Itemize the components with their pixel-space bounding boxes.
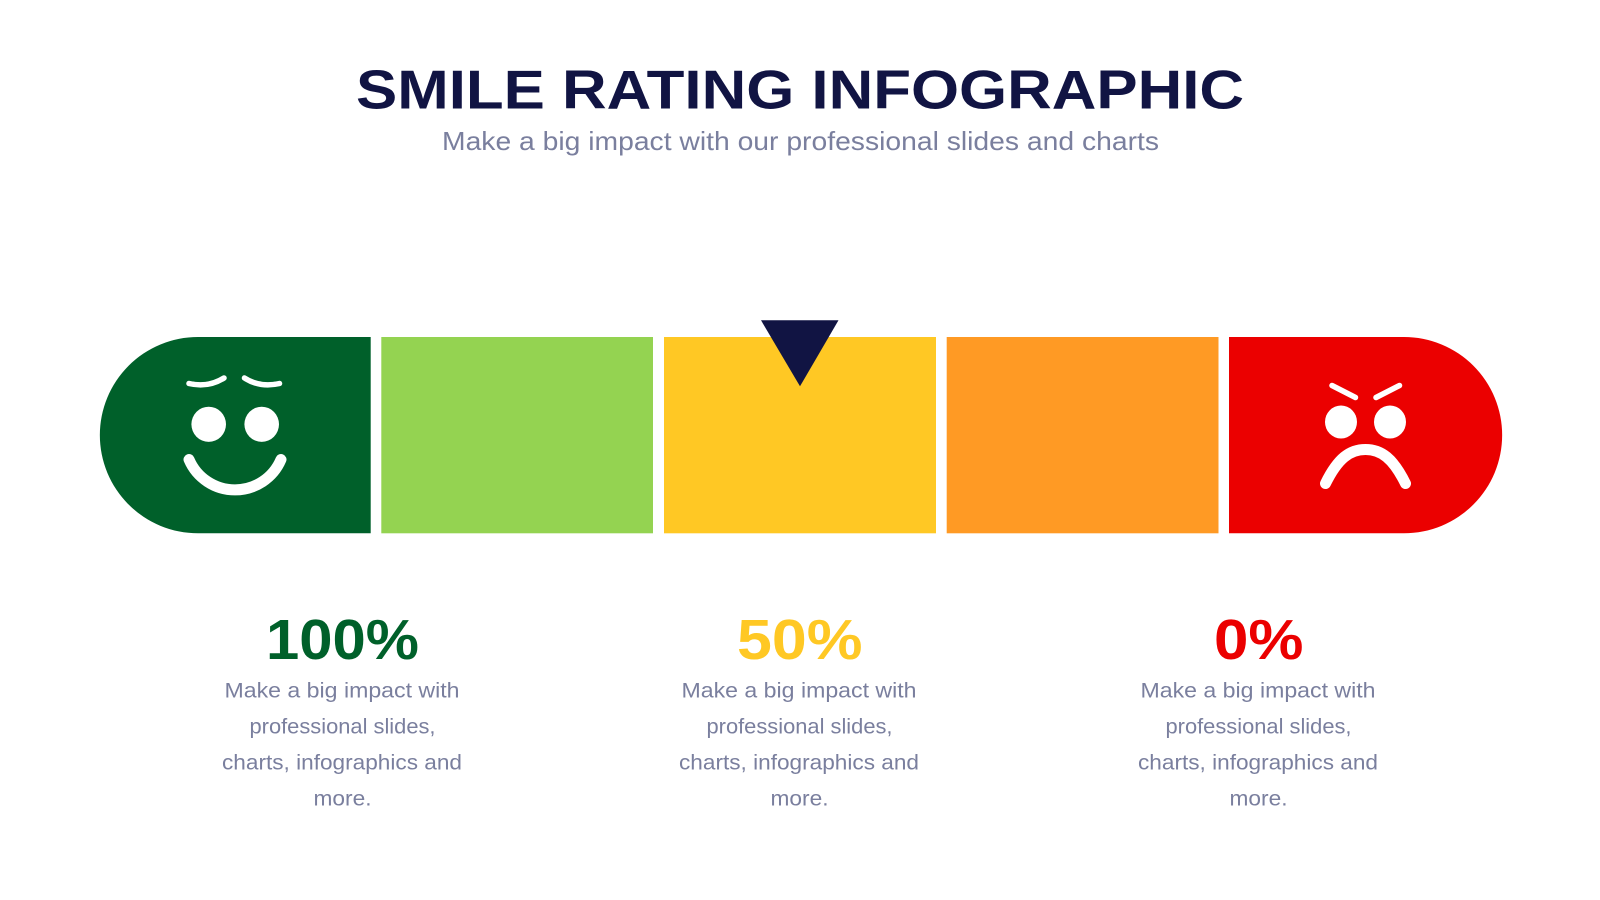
description: Make a big impact with xyxy=(1140,680,1376,702)
segment: dark green with happy face xyxy=(100,337,371,533)
subtitle: Make a big impact with our professional slides and charts xyxy=(442,126,1159,156)
description xyxy=(679,680,919,810)
description: Make a big impact with xyxy=(682,680,916,702)
value: 0%: 0% xyxy=(1214,608,1304,672)
segment: light green xyxy=(381,337,653,533)
description: charts, infographics and xyxy=(679,752,919,774)
icon: happy face xyxy=(189,378,281,490)
segment: red with angry face xyxy=(1229,337,1502,533)
description: professional slides, xyxy=(250,716,436,738)
segment: yellow xyxy=(664,337,936,533)
description xyxy=(222,680,462,810)
icon: angry face xyxy=(1325,386,1406,484)
column: 0% xyxy=(1138,608,1378,810)
title: SMILE RATING INFOGRAPHIC xyxy=(356,58,1244,120)
segment: orange xyxy=(947,337,1218,533)
description: Make a big impact with xyxy=(224,680,460,702)
column: 50% xyxy=(679,608,919,810)
rating bar xyxy=(100,337,1502,533)
description: professional slides, xyxy=(1166,716,1352,738)
value: 100%: 100% xyxy=(266,608,419,672)
description: more. xyxy=(314,788,372,810)
value: 50%: 50% xyxy=(737,608,862,672)
description: more. xyxy=(1230,788,1288,810)
column: 100% xyxy=(222,608,462,810)
description: professional slides, xyxy=(706,716,892,738)
description: more. xyxy=(770,788,828,810)
description xyxy=(1138,680,1378,810)
marker: triangle pointer xyxy=(761,320,838,386)
description: charts, infographics and xyxy=(222,752,462,774)
description: charts, infographics and xyxy=(1138,752,1378,774)
